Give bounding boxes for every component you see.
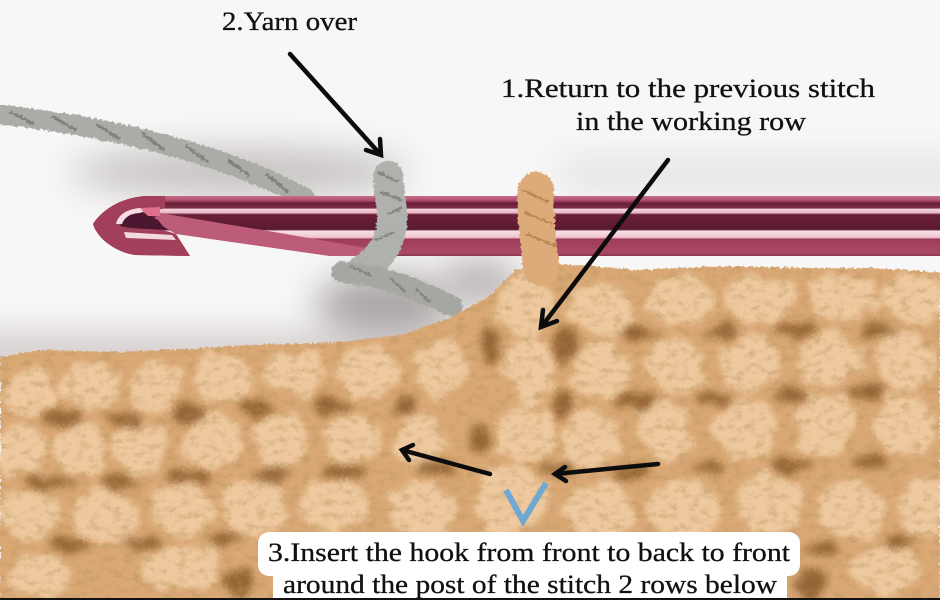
arrow: right post xyxy=(555,464,658,481)
arrow: return to previous stitch xyxy=(541,160,668,327)
grey yarn strand behind the hook xyxy=(0,112,305,198)
marker: blue V on the post stitch xyxy=(506,483,546,521)
stitch shadows xyxy=(26,323,916,599)
crochet hook xyxy=(93,196,940,256)
heading: step 1 return to previous stitch: 1.Return to the previous stitch xyxy=(501,74,875,103)
hook body and shaft xyxy=(93,196,940,256)
hook tip xyxy=(93,196,190,256)
callout: step 3 insert the hook: around the post of the stitch 2 rows below xyxy=(283,570,777,599)
fabric: crochet swatch in tan yarn xyxy=(0,264,940,598)
grey yarn loop around the hook xyxy=(342,172,452,306)
stitch highlights xyxy=(0,273,940,597)
arrow: left post xyxy=(402,445,490,474)
heading: step 1 return to previous stitch xyxy=(501,74,875,136)
hook flat throat xyxy=(152,213,372,256)
arrow: yarn over xyxy=(290,54,381,155)
heading: step 2 yarn over: 2.Yarn over xyxy=(222,7,357,36)
callout: step 3 insert the hook xyxy=(258,532,800,600)
heading: step 1 return to previous stitch: in the working row xyxy=(576,107,806,136)
yarn strand texture xyxy=(0,266,940,598)
callout: step 3 insert the hook: 3.Insert the hook from front to back to front xyxy=(268,538,791,567)
tan yarn loop over the hook xyxy=(522,190,556,268)
